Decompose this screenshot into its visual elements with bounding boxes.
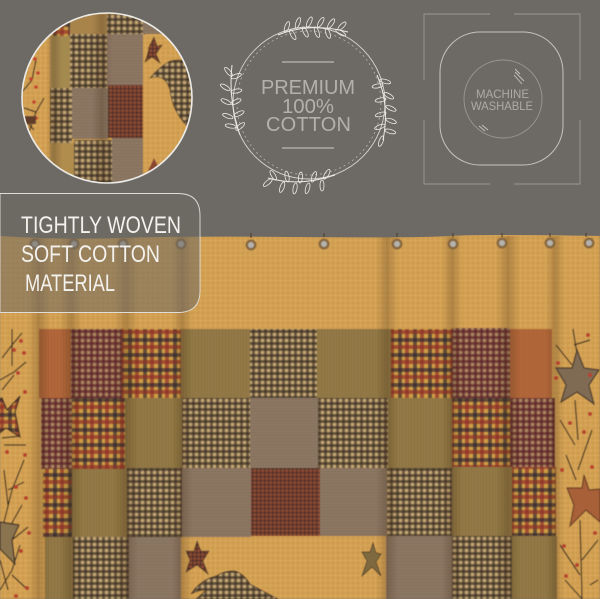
- shine marks: [479, 69, 524, 131]
- callout: tightly woven: [0, 194, 200, 312]
- curtain fold shading: [28, 236, 564, 599]
- badge text: 100%: [282, 96, 334, 118]
- right laurel: [372, 75, 397, 147]
- detail crow: [150, 60, 195, 130]
- curtain: [0, 230, 600, 599]
- premium cotton badge: [219, 16, 397, 194]
- washable text: [471, 87, 533, 113]
- machine washable badge: [424, 14, 580, 184]
- badge rules: [282, 62, 334, 148]
- washable text: MACHINE: [476, 87, 529, 101]
- appliqué crow: [191, 571, 278, 599]
- bottom laurel: [262, 168, 335, 194]
- badge text: [261, 77, 355, 136]
- callout text: [21, 212, 181, 297]
- top laurel: [278, 16, 348, 41]
- callout text: SOFT COTTON: [21, 241, 160, 268]
- circular detail photo: [20, 10, 195, 188]
- badge rings: [233, 27, 385, 179]
- corner brackets: [424, 14, 580, 184]
- appliqué olive star: [362, 543, 381, 576]
- right border branches and stars: [554, 329, 600, 599]
- rounded frame: [440, 32, 563, 165]
- detail star: [145, 37, 162, 63]
- badge text: COTTON: [266, 114, 351, 136]
- callout text: TIGHTLY WOVEN: [21, 212, 181, 239]
- left laurel: [219, 65, 246, 135]
- badge text: PREMIUM: [261, 77, 355, 99]
- left border branches and stars: [0, 329, 31, 598]
- patchwork quilt panel: [39, 328, 557, 599]
- washable text: WASHABLE: [471, 99, 533, 113]
- circle: [464, 60, 542, 138]
- detail branches: [22, 57, 44, 135]
- curtain hook stems: [251, 233, 586, 238]
- callout text: MATERIAL: [25, 270, 115, 297]
- appliqué red star: [186, 541, 209, 574]
- curtain hooks: [30, 238, 594, 250]
- detail small star: [148, 158, 158, 172]
